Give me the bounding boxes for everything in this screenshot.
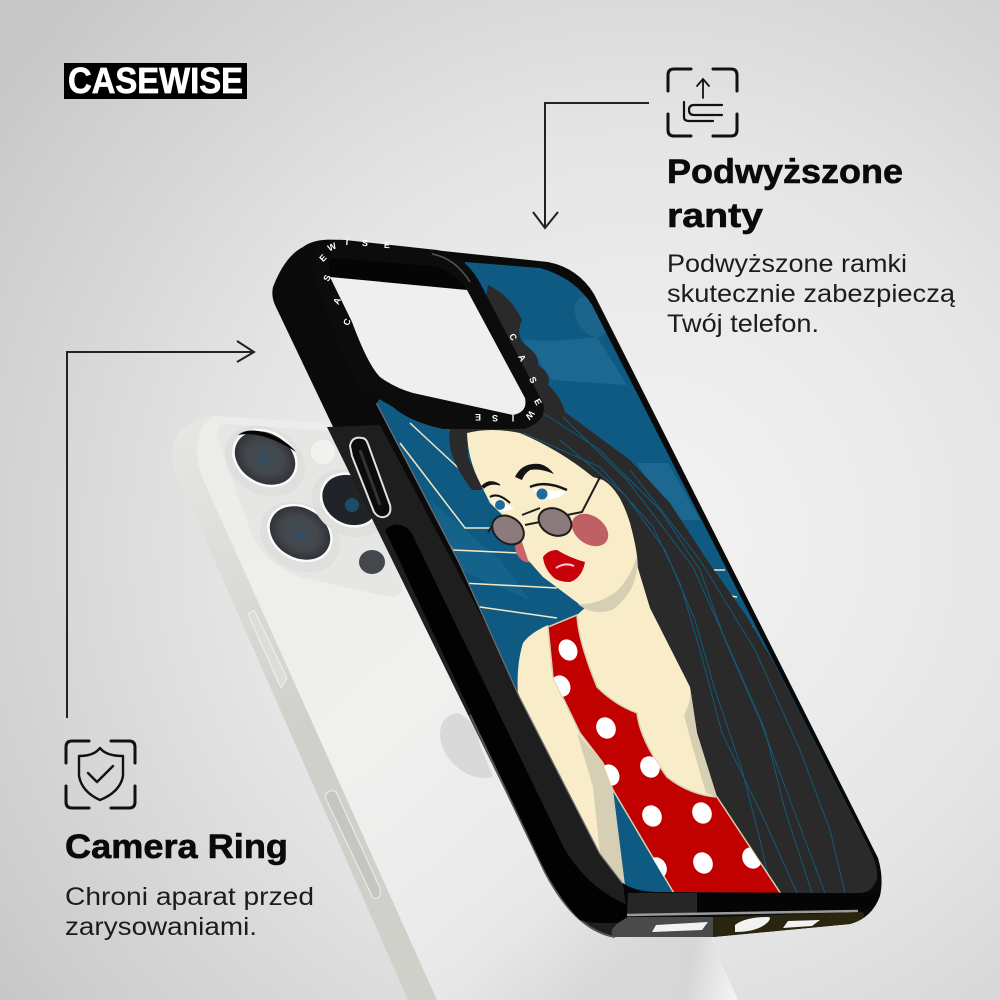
- lips: [543, 550, 585, 582]
- side buttons: [248, 610, 380, 898]
- camera island: [218, 424, 402, 596]
- lens: bottom: [247, 487, 353, 587]
- chest shadow: [684, 687, 717, 797]
- decorative cream lines: [395, 423, 753, 627]
- phone side band: [172, 416, 437, 1000]
- ring lettering: S: [321, 273, 333, 283]
- ring opening: [330, 277, 526, 415]
- translucent side rim: [327, 425, 628, 937]
- ring lettering: C: [341, 316, 353, 327]
- rim highlight: [377, 403, 623, 883]
- icon: apple logo: [440, 713, 493, 778]
- ring lettering: S: [492, 413, 498, 423]
- left cheek behind face: [515, 541, 530, 562]
- lens: top: [212, 411, 318, 511]
- ring frame: [313, 240, 544, 429]
- ring lettering: I: [512, 413, 514, 423]
- ring lettering: E: [317, 252, 329, 264]
- ring lettering: A: [331, 295, 343, 306]
- eyes and brows: [482, 464, 568, 511]
- neck and chest: [577, 565, 717, 797]
- sunglasses: [487, 477, 600, 550]
- right cheek: [572, 514, 608, 546]
- charging ports: [652, 917, 820, 932]
- ring lettering: S: [527, 375, 539, 385]
- arm shadow: [577, 733, 625, 885]
- volume button: [350, 438, 390, 517]
- heading: raised edges: Podwyższone: [667, 153, 903, 191]
- text: raised edges description: Podwyższone ramki: [667, 250, 907, 278]
- arrow: to camera ring: [67, 341, 254, 718]
- lower shading below the case: [480, 920, 738, 1000]
- ring lettering: S: [362, 238, 368, 248]
- left arm: [518, 625, 625, 890]
- face: [467, 430, 638, 609]
- arrow: to raised edges: [533, 103, 649, 228]
- text: raised edges description: Twój telefon.: [667, 310, 819, 338]
- ring lettering: A: [516, 353, 528, 364]
- text: camera ring description: zarysowaniami.: [65, 913, 257, 941]
- icon: shield: [66, 741, 135, 808]
- hair: [449, 285, 880, 900]
- ring lettering: W: [523, 409, 537, 422]
- microphone: [359, 550, 385, 574]
- black case: [272, 240, 882, 937]
- polka dots: [548, 636, 766, 882]
- ring lettering: E: [384, 240, 390, 250]
- ring lettering: I: [345, 237, 349, 247]
- hair strands: [523, 413, 845, 893]
- ring inner wall: [329, 258, 467, 290]
- case body: [272, 240, 882, 937]
- heading: raised edges: ranty: [667, 197, 763, 235]
- flash: [310, 439, 336, 465]
- bottom ledge: [623, 884, 880, 914]
- text: camera ring description: Chroni aparat przed: [65, 883, 314, 911]
- camera ring: [313, 237, 544, 429]
- heading: camera ring: Camera Ring: [65, 828, 288, 866]
- logo: CASEWISE: [68, 60, 243, 101]
- lens: right: [299, 455, 401, 551]
- ring lettering: E: [475, 412, 481, 422]
- outer grey edge: [470, 715, 615, 937]
- text: raised edges description: skutecznie zabezpieczą: [667, 280, 955, 308]
- lower ledge: [713, 912, 864, 937]
- ring lettering: E: [532, 397, 544, 407]
- jaw shadow: [578, 555, 637, 612]
- case artwork: [377, 262, 878, 893]
- ring lettering: W: [326, 240, 338, 253]
- lighter background bands: [523, 337, 627, 385]
- ring lettering: C: [507, 332, 519, 343]
- red dress: [548, 615, 785, 900]
- white phone behind the case: [172, 411, 738, 1000]
- icon: raised edges: [668, 69, 737, 136]
- ring lettering: [317, 237, 544, 423]
- side slot: [385, 524, 629, 923]
